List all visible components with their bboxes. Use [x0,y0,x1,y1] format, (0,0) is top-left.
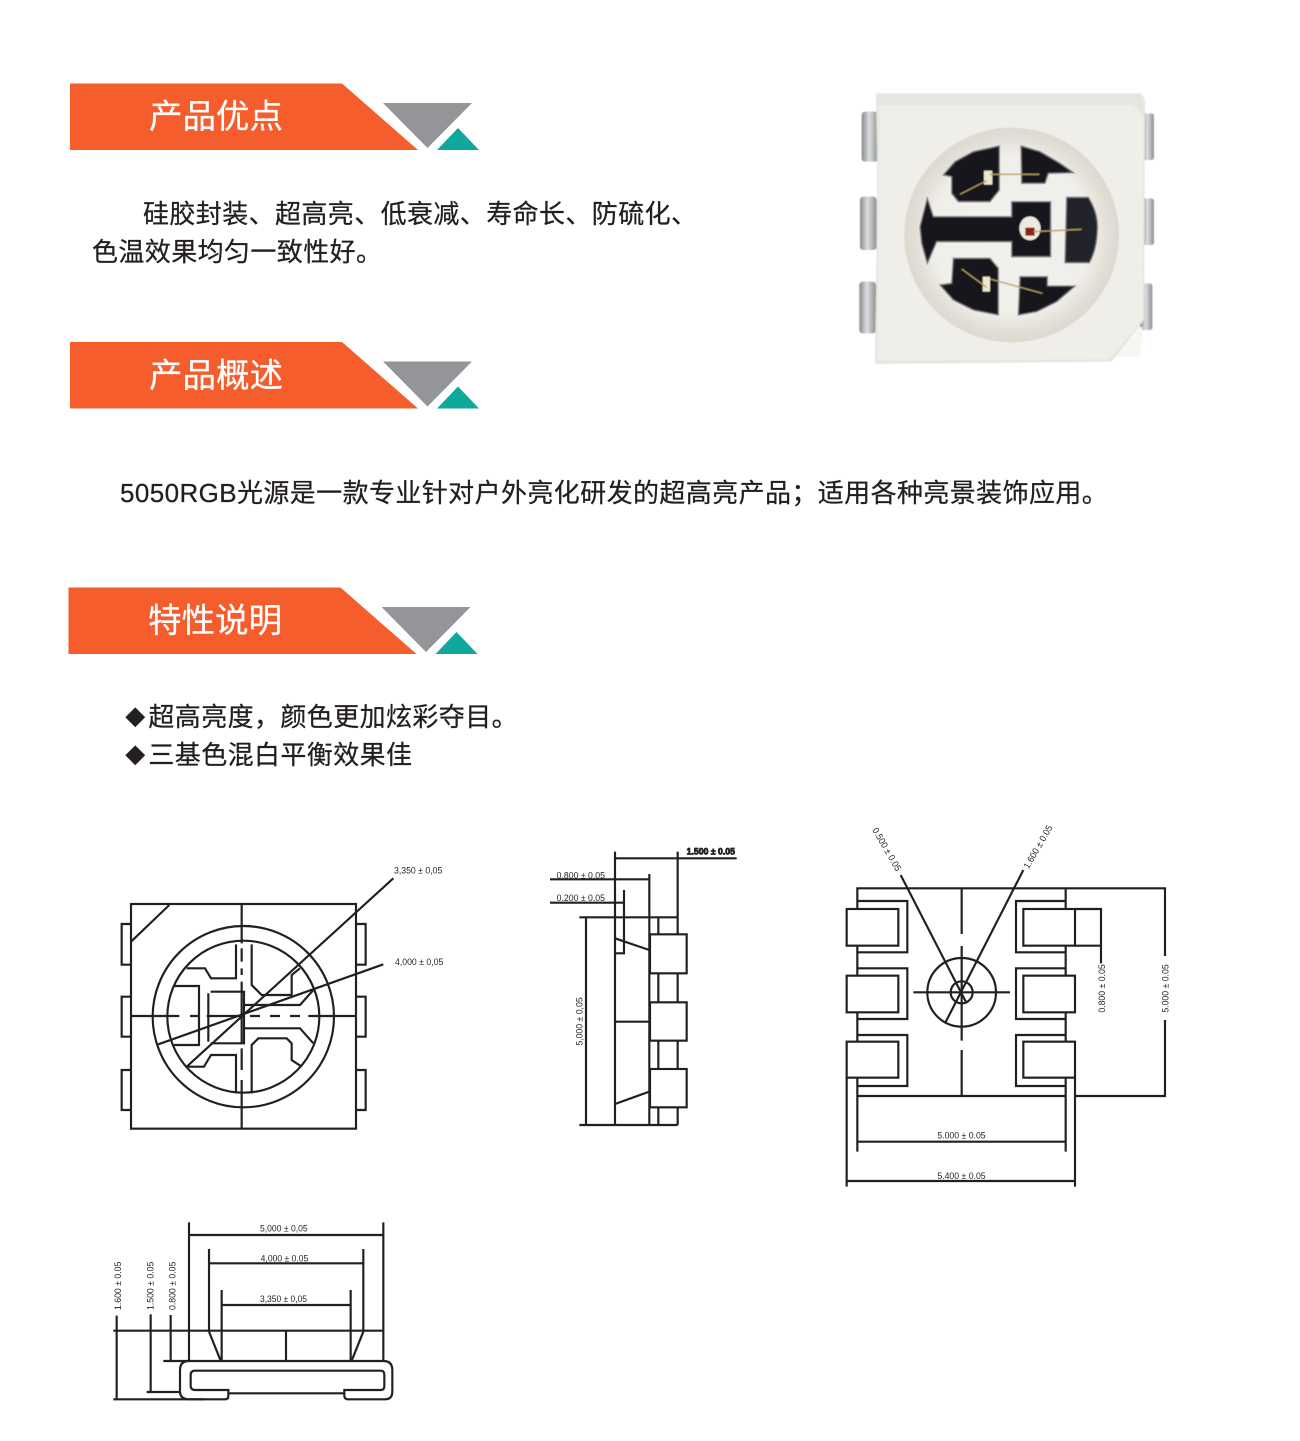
banner: characteristics [68,588,478,654]
text block: characteristics list: ◆ [125,746,145,768]
text block: characteristics list [125,702,518,770]
text block: characteristics list: ◆ [125,708,145,730]
drawing: side view: 0.800 ± 0.05 [557,870,605,880]
drawing: front view: 3,350 ± 0,05 [260,1294,307,1304]
drawing: side view: 1.500 ± 0.05 [687,846,735,856]
drawing: bottom view: 0.500 ± 0.05 [870,826,903,873]
drawing: front view: 5,000 ± 0,05 [260,1223,308,1233]
text block: characteristics list: 超高亮度，颜色更加炫彩夺目。 [148,702,518,732]
drawing: bottom view [847,823,1170,1187]
text block: characteristics list: 三基色混白平衡效果佳 [148,740,412,770]
banner: product overview [70,342,479,408]
drawing: bottom view: 1.600 ± 0.05 [1022,823,1055,870]
drawing: side view [550,846,737,1125]
drawing: front view: 1.600 ± 0.05 [113,1262,123,1310]
text block: overview: 5050RGB光源是一款专业针对户外亮化研发的超高亮产品；适用各种亮景装饰应用。 [120,478,1108,508]
drawing: side view: 5,000 ± 0,05 [574,997,584,1046]
banner: product advantages [70,84,479,150]
drawing: top view: 3,350 ± 0,05 [394,865,442,875]
drawing: top view [122,865,443,1129]
text block: advantages [92,199,697,267]
drawing: bottom view: 0.800 ± 0.05 [1097,964,1107,1013]
heading: characteristics: 特性说明 [148,603,282,640]
drawing: bottom view: 5.000 ± 0.05 [1160,964,1170,1013]
photo: 5050 RGB LED [859,93,1154,364]
drawing: front view [113,1222,392,1399]
drawing: bottom view: 5.000 ± 0.05 [937,1130,986,1140]
text block: advantages: 硅胶封装、超高亮、低衰减、寿命长、防硫化、 [143,199,697,229]
heading: product overview: 产品概述 [149,358,283,395]
drawing: side view: 0.200 ± 0.05 [557,893,605,903]
drawing: bottom view: 5.400 ± 0.05 [937,1171,986,1181]
drawing: top view: 4,000 ± 0,05 [395,957,443,967]
drawing: front view: 4,000 ± 0,05 [261,1253,308,1263]
heading: product advantages: 产品优点 [149,99,283,136]
drawing: front view: 1.500 ± 0.05 [146,1262,156,1310]
text block: advantages: 色温效果均匀一致性好。 [92,237,382,267]
drawing: front view: 0.800 ± 0.05 [167,1262,177,1310]
